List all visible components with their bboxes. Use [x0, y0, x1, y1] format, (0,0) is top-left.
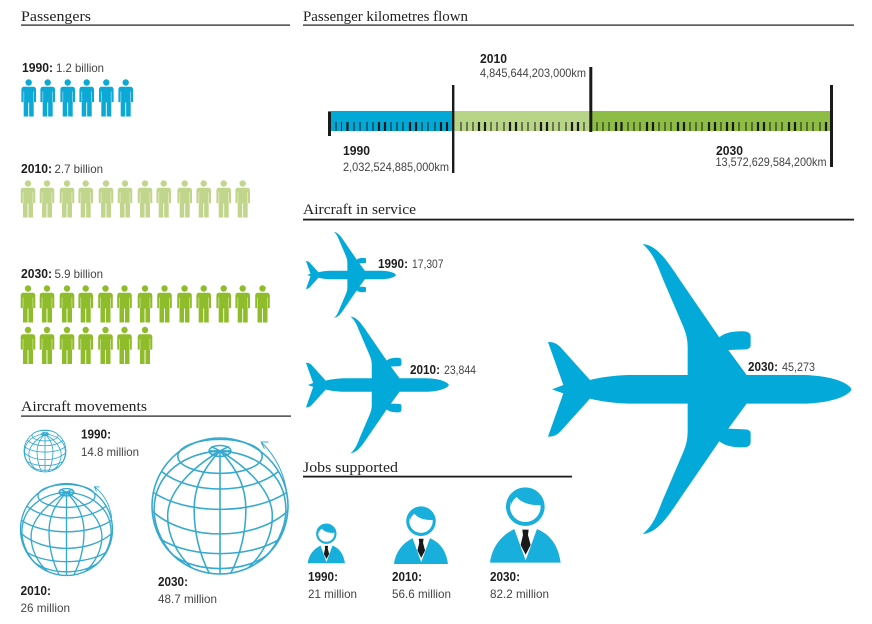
icon: globe 1990 — [24, 430, 66, 472]
label: jobs 2010: 56.6 million — [392, 587, 451, 601]
label: movements 2030: 48.7 million — [158, 592, 217, 606]
label: aircraft 2010: 2010: — [410, 363, 440, 377]
icon: plane 2010 — [306, 317, 449, 453]
label: km 1990 — [343, 144, 449, 174]
label: movements 2010: 26 million — [20, 601, 70, 615]
label: aircraft 2030: 2030: — [748, 360, 778, 374]
label: jobs 2010 — [392, 570, 451, 601]
icon: worker 1990 — [308, 523, 345, 563]
label: aircraft 2010 — [410, 363, 476, 377]
label: movements 1990: 14.8 million — [81, 445, 139, 459]
icon: worker 2010 — [394, 506, 448, 564]
icons: 2010 passengers — [21, 180, 250, 218]
label: jobs 2030: 2030: — [490, 570, 520, 584]
label: movements 2010: 2010: — [20, 584, 51, 598]
icon: worker 2030 — [490, 487, 561, 563]
label: aircraft 2030 — [748, 360, 815, 374]
label: movements 2030: 2030: — [158, 575, 188, 589]
label: km 2030: 2030 — [716, 144, 743, 158]
label: passengers 1990: 1.2 billion — [56, 61, 104, 75]
label: jobs 1990: 21 million — [308, 587, 357, 601]
label: passengers 2010 — [21, 162, 103, 176]
label: movements 1990: 1990: — [81, 428, 111, 442]
label: jobs 2010: 2010: — [392, 570, 422, 584]
label: aircraft 1990: 17,307 — [412, 257, 444, 271]
bar chart: distance scale — [328, 67, 833, 173]
label: aircraft 2030: 45,273 — [782, 360, 815, 374]
label: passengers 1990 — [22, 61, 104, 75]
heading: aircraft movements: Aircraft movements — [21, 399, 147, 415]
label: km 2010 — [480, 52, 586, 80]
label: jobs 2030: 82.2 million — [490, 587, 549, 601]
label: movements 1990 — [81, 428, 139, 459]
label: km 1990: 2,032,524,885,000km — [343, 160, 449, 174]
label: km 2030 — [716, 144, 827, 169]
label: movements 2010 — [20, 584, 70, 615]
icons: 2030 passengers — [21, 285, 270, 364]
label: passengers 2010: 2010: — [21, 162, 52, 176]
icon: plane 2030 — [548, 244, 852, 534]
heading: passengers: Passengers — [21, 9, 91, 25]
label: passengers 2010: 2.7 billion — [54, 162, 103, 176]
label: movements 2030 — [158, 575, 217, 606]
icon: globe 2030 with arrow — [152, 438, 288, 574]
label: passengers 2030: 5.9 billion — [54, 267, 103, 281]
label: aircraft 2010: 23,844 — [444, 363, 476, 377]
heading: jobs supported: Jobs supported — [303, 460, 399, 476]
label: aircraft 1990: 1990: — [378, 257, 408, 271]
icon: plane 1990 — [306, 232, 396, 318]
label: jobs 1990: 1990: — [308, 570, 338, 584]
icon: globe 2010 with arrow — [20, 484, 112, 576]
label: passengers 2030: 2030: — [21, 267, 52, 281]
label: jobs 1990 — [308, 570, 357, 601]
label: aircraft 1990 — [378, 257, 444, 271]
label: jobs 2030 — [490, 570, 549, 601]
label: passengers 2030 — [21, 267, 103, 281]
panel: aircraft in service — [303, 202, 854, 534]
heading: aircraft in service: Aircraft in service — [303, 202, 416, 218]
panel: passenger kilometres flown — [303, 9, 854, 174]
heading: passenger kilometres flown: Passenger kilometres flown — [303, 9, 469, 25]
label: km 2010: 2010 — [480, 52, 507, 66]
icons: 1990 passengers — [21, 79, 133, 116]
label: km 2010: 4,845,644,203,000km — [480, 66, 586, 80]
label: km 1990: 1990 — [343, 144, 370, 158]
panel: passengers — [21, 9, 290, 364]
label: passengers 1990: 1990: — [22, 61, 53, 75]
panel: jobs supported — [303, 460, 572, 601]
label: km 2030: 13,572,629,584,200km — [716, 155, 827, 169]
panel: aircraft movements — [20, 399, 291, 615]
